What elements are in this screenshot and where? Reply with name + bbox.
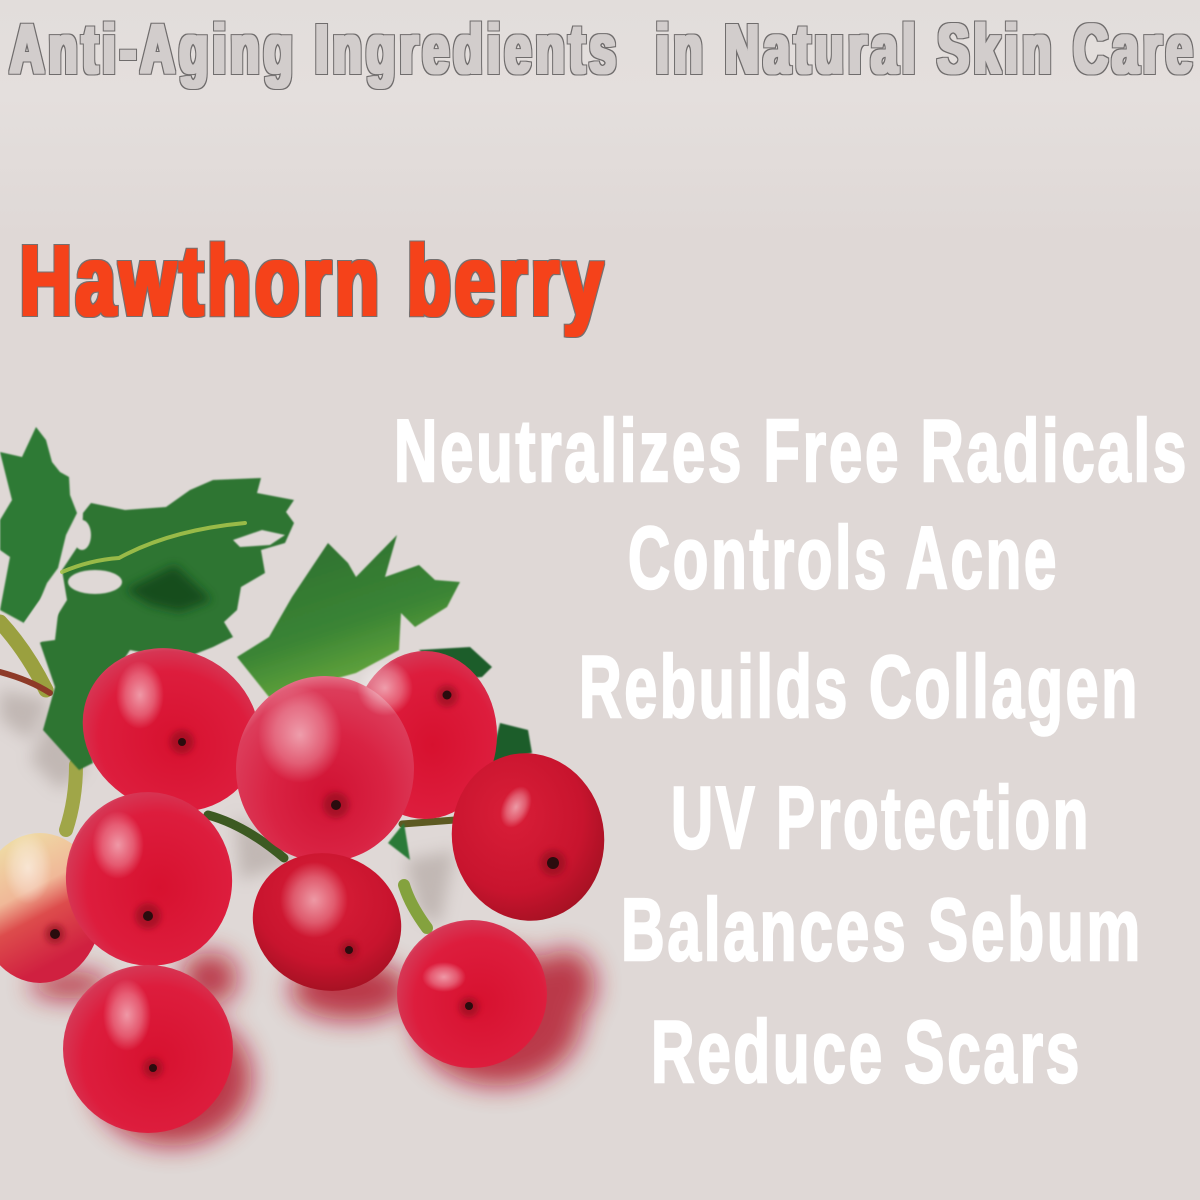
leaf shading xyxy=(125,565,212,612)
stems xyxy=(0,622,455,928)
berry shadows xyxy=(0,690,595,1146)
leaf: small lower xyxy=(388,823,410,860)
berry: yellow left xyxy=(0,833,102,983)
berry: centre low xyxy=(233,832,421,1012)
berry highlights xyxy=(4,660,538,1051)
berries xyxy=(0,619,617,1133)
berry: right xyxy=(439,741,617,933)
berry: top left xyxy=(56,619,286,841)
berry: lower right xyxy=(397,920,547,1068)
leaf: far left xyxy=(0,427,77,623)
leaf: behind right berry xyxy=(490,723,532,763)
leaf: right xyxy=(237,535,460,697)
leaf: behind rear berry xyxy=(419,647,492,680)
benefits list xyxy=(394,401,1189,1101)
leaf gaps xyxy=(24,520,285,642)
berry: bottom left xyxy=(63,965,233,1133)
berry: middle left xyxy=(52,779,246,979)
berry: centre top xyxy=(236,676,414,862)
leaf: upper and lower left cluster xyxy=(40,478,294,770)
berry: rear top right xyxy=(353,651,497,819)
leaf vein xyxy=(62,523,245,572)
leaves xyxy=(0,427,532,860)
heading: Hawthorn berry: Hawthorn berry xyxy=(20,225,607,337)
berry calyx dimples xyxy=(45,685,566,1078)
illustration: hawthorn berry branch xyxy=(0,427,617,1146)
